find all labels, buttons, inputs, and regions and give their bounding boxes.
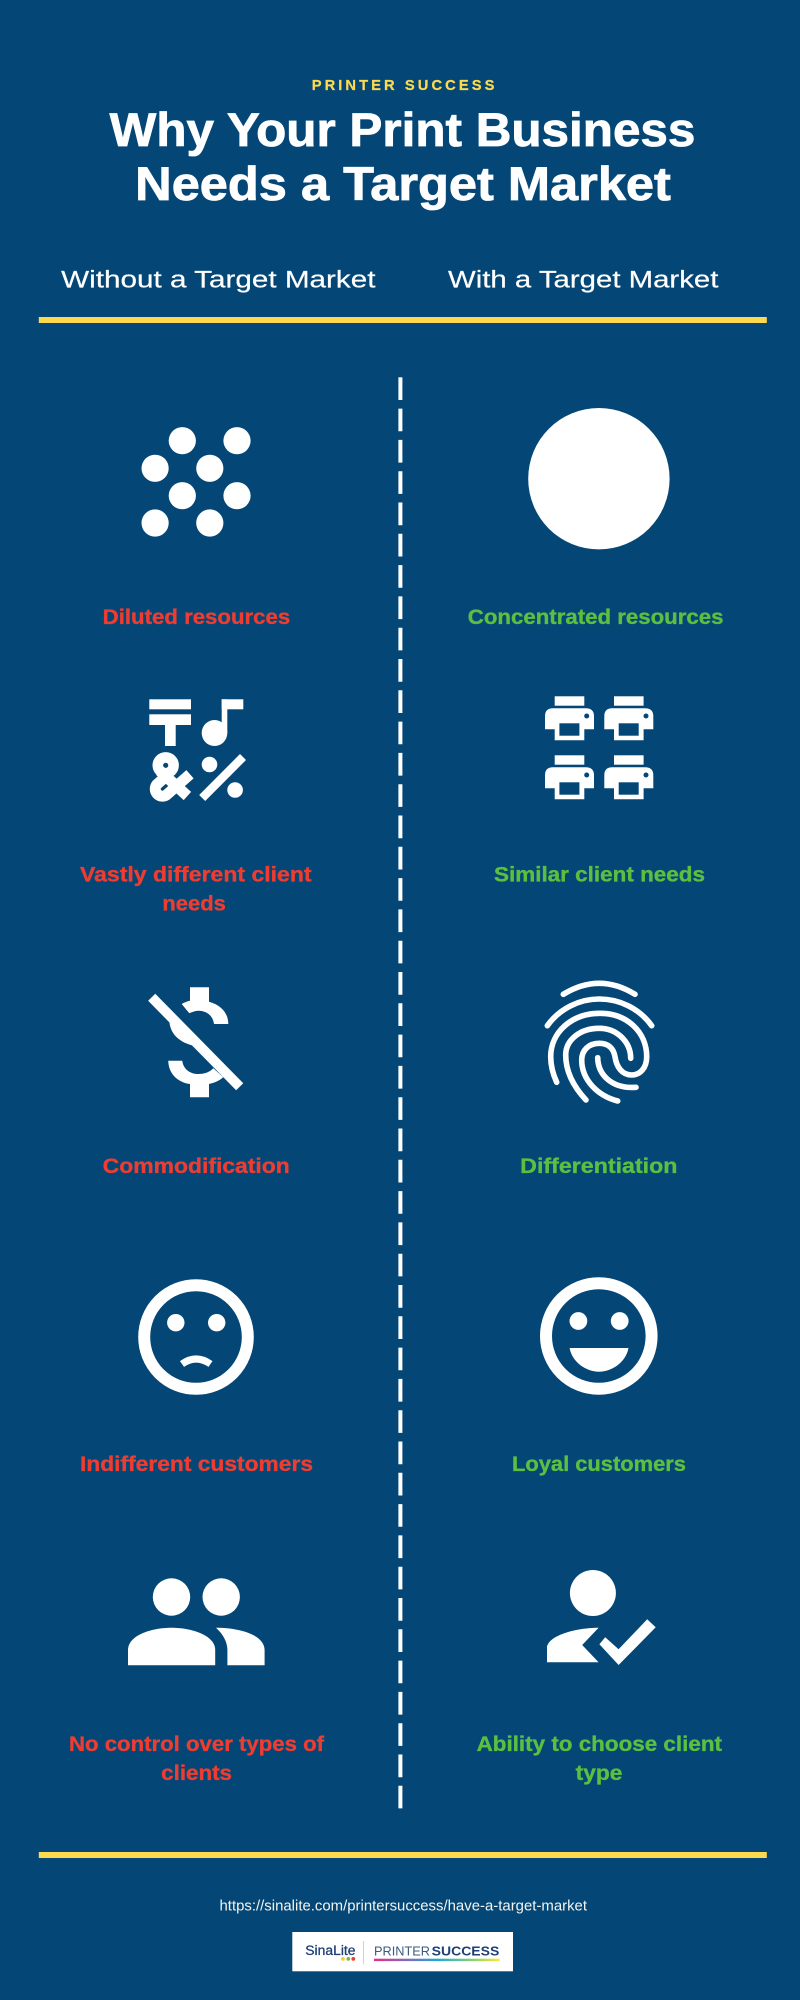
label: ability to choose client type: type	[576, 1762, 622, 1785]
label: no control over types of clients: clients	[161, 1762, 232, 1785]
icon: fingerprint	[547, 983, 652, 1101]
eyebrow: Printer Success: PRINTER SUCCESS	[312, 78, 495, 94]
label: concentrated resources: Concentrated resources	[468, 606, 724, 629]
icon: happy face	[546, 1283, 652, 1389]
icon: solid circle	[528, 408, 670, 549]
title: Needs a Target Market	[135, 157, 671, 210]
icon: two people	[128, 1578, 265, 1665]
label: ability to choose client type: Ability to choose client	[477, 1733, 722, 1756]
label: vastly different client needs: needs	[162, 893, 226, 916]
label: similar client needs: Similar client needs	[494, 864, 705, 887]
logo panel: SinaLite	[305, 1943, 356, 1958]
icon: person with check mark	[547, 1570, 656, 1665]
icon: mixed symbols	[149, 699, 243, 798]
logo panel	[292, 1932, 513, 1971]
label: no control over types of clients	[69, 1733, 325, 1785]
icon: sad face	[144, 1285, 248, 1389]
label: no control over types of clients: No control over types of	[69, 1733, 325, 1756]
label: ability to choose client type	[477, 1733, 722, 1785]
bottom yellow divider	[39, 1852, 767, 1858]
title: Why Your Print Business	[110, 103, 695, 156]
label: differentiation: Differentiation	[520, 1155, 678, 1178]
label: loyal customers: Loyal customers	[512, 1453, 686, 1476]
icon: crossed-out dollar	[152, 987, 240, 1097]
label: vastly different client needs: Vastly different client	[80, 864, 312, 887]
label: commodification: Commodification	[103, 1155, 290, 1178]
source URL: https://sinalite.com/printersuccess/have-a-target-market	[220, 1899, 587, 1915]
top yellow divider	[39, 317, 767, 323]
column heading: with: With a Target Market	[448, 266, 719, 293]
dashed centre divider	[398, 377, 402, 1808]
label: indifferent customers: Indifferent customers	[80, 1453, 313, 1476]
icon: four printers	[545, 696, 653, 799]
label: diluted resources: Diluted resources	[103, 606, 290, 629]
logo panel: SUCCESS	[432, 1943, 500, 1958]
icon: scattered dots	[142, 427, 251, 537]
column heading: without: Without a Target Market	[61, 266, 376, 293]
title	[110, 103, 695, 210]
label: vastly different client needs	[80, 864, 312, 916]
logo panel: PRINTER	[374, 1943, 430, 1958]
